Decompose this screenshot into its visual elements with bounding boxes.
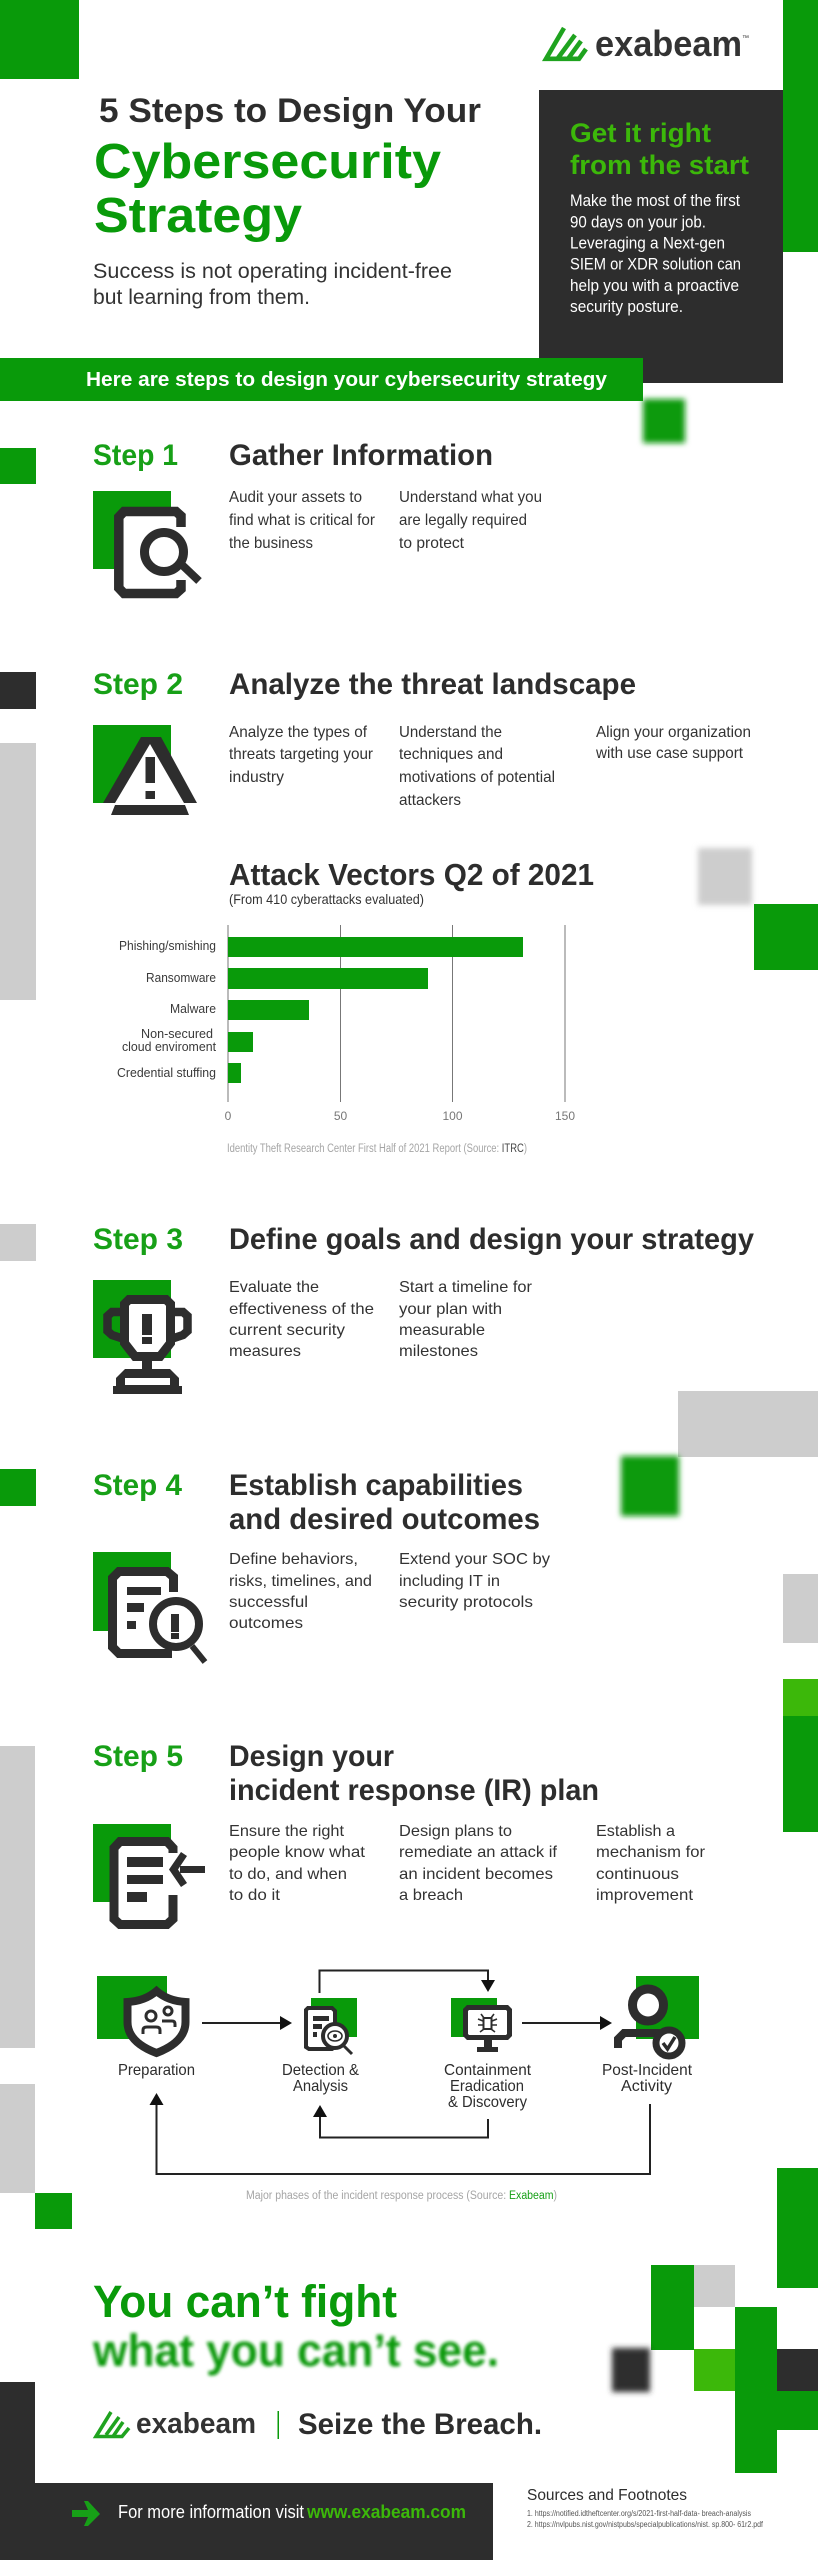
icon: phone with magnifier xyxy=(93,491,199,594)
arrow: containment to post-incident xyxy=(522,2016,612,2030)
arrow: detection to containment xyxy=(320,1970,495,1993)
step 1 heading: Gather Information xyxy=(229,439,493,472)
banner: steps intro xyxy=(0,358,643,401)
step 5 label: Step 5 xyxy=(93,1740,183,1773)
logo and tagline: exabeam xyxy=(136,2408,256,2440)
decorative block: right green lower xyxy=(777,2168,818,2288)
label: detection and analysis: Detection & xyxy=(282,2062,359,2079)
icon: trophy xyxy=(93,1280,188,1394)
arrow: containment back to detection xyxy=(313,2105,488,2138)
label: post-incident activity: Activity xyxy=(621,2078,672,2095)
icon: warning triangle xyxy=(93,725,197,815)
arrow: preparation to detection xyxy=(202,2016,292,2030)
sources and footnotes: 1. https://notified.idtheftcenter.org/s/2021-first-half-data- breach-analysis xyxy=(527,2509,751,2518)
bar chart: attack vectors xyxy=(117,925,575,1123)
panel: get it right from the start: help you with a proactive xyxy=(570,277,739,295)
sources and footnotes xyxy=(527,2487,764,2529)
decorative block: right gray large xyxy=(678,1391,818,1457)
bar chart: attack vectors: Ransomware xyxy=(146,970,216,985)
label: detection and analysis: Analysis xyxy=(293,2078,348,2095)
title block: Cybersecurity xyxy=(94,135,441,189)
step 4 heading xyxy=(229,1469,540,1536)
label: containment: Eradication xyxy=(450,2078,524,2095)
step 1 text column 1: find what is critical for xyxy=(229,512,376,529)
step 2 text column 1: industry xyxy=(229,769,284,786)
decorative block: top left green xyxy=(0,0,79,79)
logo: exabeam header: exabeam xyxy=(595,23,742,64)
step 5 text column 3: mechanism for xyxy=(596,1844,706,1861)
decorative block: blurred green xyxy=(643,399,685,443)
title block xyxy=(94,92,481,243)
chart heading: Attack Vectors Q2 of 2021 xyxy=(229,857,594,892)
footer bar xyxy=(35,2483,493,2560)
step 5 text column 1: to do, and when xyxy=(229,1866,347,1883)
step 3 text column 1: effectiveness of the xyxy=(229,1301,374,1318)
step 3 text column 2: Start a timeline for xyxy=(399,1279,533,1296)
step 5 text column 1: Ensure the right xyxy=(229,1823,345,1840)
decorative block: right light green xyxy=(783,1679,818,1716)
label: detection and analysis xyxy=(282,2062,359,2095)
decorative block: left gray step 5 xyxy=(0,1746,35,2048)
closing headline: You can’t fight xyxy=(93,2276,397,2327)
step 4 text column 1: Define behaviors, xyxy=(229,1551,358,1568)
decorative block: blurred dark xyxy=(612,2348,650,2392)
step 5 text column 2: an incident becomes xyxy=(399,1866,553,1883)
decorative block: left dark xyxy=(0,672,36,709)
step 2 text column 3 xyxy=(595,724,751,762)
title block: 5 Steps to Design Your xyxy=(99,92,481,130)
footer bar: For more information visit xyxy=(118,2502,304,2522)
bar chart: attack vectors: Malware xyxy=(170,1001,216,1016)
step 2 text column 3: Align your organization xyxy=(596,724,751,741)
step 5 text column 1: to do it xyxy=(229,1887,281,1904)
step 2 text column 1: threats targeting your xyxy=(229,746,374,763)
step 1 text column 1: Audit your assets to xyxy=(229,489,362,506)
step 3 text column 2: measurable xyxy=(399,1322,485,1339)
step 2 heading: Analyze the threat landscape xyxy=(229,668,636,701)
sources and footnotes: Sources and Footnotes xyxy=(527,2487,687,2504)
step 1 label: Step 1 xyxy=(93,439,178,472)
decorative block: left gray step 3 xyxy=(0,1224,36,1261)
step 5 text column 2 xyxy=(399,1823,558,1904)
step 1 text column 2: to protect xyxy=(399,535,465,552)
step 3 text column 1: Evaluate the xyxy=(229,1279,319,1296)
closing headline: what you can’t see. xyxy=(92,2325,499,2376)
label: containment: Containment xyxy=(444,2062,532,2079)
decorative block: right green xyxy=(754,904,818,970)
decorative block: blurred green step 4 xyxy=(621,1456,679,1516)
step 5 text column 3: continuous xyxy=(596,1866,679,1883)
icon: containment monitor with bug xyxy=(451,1998,510,2052)
step 4 text column 1: successful xyxy=(229,1594,308,1611)
bar chart: attack vectors: 150 xyxy=(555,1109,575,1123)
label: post-incident activity: Post-Incident xyxy=(602,2062,693,2079)
subtitle: Success is not operating incident-free xyxy=(93,259,452,283)
bar chart: attack vectors: cloud enviroment xyxy=(122,1039,216,1054)
step 5 heading: Design your xyxy=(229,1740,394,1773)
icon: detection and analysis xyxy=(306,1998,357,2054)
decorative pattern: bottom right blocks xyxy=(651,2265,818,2473)
label: post-incident activity xyxy=(602,2062,693,2095)
step 1 text column 1: the business xyxy=(229,535,313,552)
panel: get it right from the start: Make the most of the first xyxy=(570,192,740,210)
step 2 text column 2: techniques and xyxy=(399,746,503,763)
step 5 text column 3: Establish a xyxy=(596,1823,675,1840)
panel: get it right from the start: 90 days on your job. xyxy=(570,214,706,232)
step 2 text column 3: with use case support xyxy=(595,745,744,762)
bar chart: attack vectors: 100 xyxy=(442,1109,463,1123)
banner: steps intro: Here are steps to design your cybersecurity strategy xyxy=(86,368,608,391)
step 4 label: Step 4 xyxy=(93,1469,182,1502)
logo and tagline xyxy=(96,2408,542,2441)
step 4 text column 1: outcomes xyxy=(229,1615,303,1632)
icon: preparation shield xyxy=(97,1976,186,2053)
step 4 heading: Establish capabilities xyxy=(229,1469,523,1502)
chart subheading: (From 410 cyberattacks evaluated) xyxy=(229,891,424,907)
step 3 text column 2 xyxy=(399,1279,533,1360)
step 5 heading: incident response (IR) plan xyxy=(229,1774,599,1807)
step 5 text column 2: a breach xyxy=(399,1887,463,1904)
decorative block: left green step 1 xyxy=(0,448,36,484)
sources and footnotes: 2. https://nvlpubs.nist.gov/nistpubs/specialpublications/nist. sp.800- 61r2.pdf xyxy=(527,2520,764,2529)
logo: exabeam header: ™ xyxy=(742,35,749,42)
title block: Strategy xyxy=(94,189,302,243)
bar chart: attack vectors: Non-secured xyxy=(141,1026,213,1041)
step 5 text column 2: Design plans to xyxy=(399,1823,512,1840)
step 2 label: Step 2 xyxy=(93,668,183,701)
subtitle xyxy=(93,259,452,309)
step 5 text column 3: improvement xyxy=(596,1887,694,1904)
step 1 text column 2 xyxy=(399,489,542,552)
label: preparation: Preparation xyxy=(118,2062,195,2079)
step 2 text column 2: attackers xyxy=(399,792,461,809)
step 2 text column 2: motivations of potential xyxy=(399,769,555,786)
decorative block: left gray lower xyxy=(0,2084,35,2193)
step 5 text column 2: remediate an attack if xyxy=(399,1844,558,1861)
decorative block: small left green xyxy=(35,2193,72,2229)
panel: get it right from the start: from the start xyxy=(570,150,749,180)
icon: document with arrow xyxy=(93,1824,205,1924)
step 1 text column 1 xyxy=(229,489,376,552)
step 5 heading xyxy=(229,1740,599,1807)
step 2 text column 2 xyxy=(399,724,555,809)
label: containment: & Discovery xyxy=(448,2094,527,2111)
closing headline xyxy=(92,2276,499,2376)
decorative block: top right green xyxy=(783,0,818,252)
step 3 text column 1: current security xyxy=(229,1322,345,1339)
step 3 text column 2: milestones xyxy=(399,1343,478,1360)
icon: document with magnifier xyxy=(93,1552,205,1662)
step 3 heading: Define goals and design your strategy xyxy=(229,1223,754,1256)
chart source note: Identity Theft Research Center First Half of 2021 Report (Source: ITRC) xyxy=(227,1143,527,1155)
decorative block: left dark footer xyxy=(0,2382,35,2560)
step 1 text column 2: are legally required xyxy=(399,512,527,529)
panel: get it right from the start: Get it right xyxy=(570,118,711,148)
decorative block: right gray small xyxy=(783,1574,818,1643)
subtitle: but learning from them. xyxy=(93,285,310,309)
arrow: post-incident back to preparation xyxy=(150,2093,650,2174)
step 4 text column 1: risks, timelines, and xyxy=(229,1573,372,1590)
step 4 heading: and desired outcomes xyxy=(229,1503,540,1536)
panel: get it right from the start: Leveraging a Next-gen xyxy=(570,234,725,252)
step 4 text column 2: security protocols xyxy=(399,1594,533,1611)
step 2 text column 1 xyxy=(229,724,374,786)
step 5 text column 1: people know what xyxy=(229,1844,366,1861)
logo and tagline: Seize the Breach. xyxy=(298,2408,542,2441)
decorative block: right green tall xyxy=(783,1716,818,1832)
icon: post-incident person with check xyxy=(618,1976,699,2056)
decorative block: left green step 4 xyxy=(0,1469,36,1506)
step 5 text column 1 xyxy=(229,1823,366,1904)
footer bar: www.exabeam.com xyxy=(306,2502,466,2522)
diagram caption: Major phases of the incident response process (Source: Exabeam) xyxy=(246,2190,557,2202)
step 4 text column 1 xyxy=(229,1551,372,1632)
step 3 label: Step 3 xyxy=(93,1223,183,1256)
bar chart: attack vectors: Phishing/smishing xyxy=(119,938,216,953)
label: containment xyxy=(444,2062,532,2111)
step 2 text column 1: Analyze the types of xyxy=(229,724,368,741)
step 3 text column 2: your plan with xyxy=(399,1301,502,1318)
panel: get it right from the start: security posture. xyxy=(570,298,683,316)
bar chart: attack vectors: 50 xyxy=(334,1109,347,1123)
panel: get it right from the start xyxy=(539,90,783,383)
step 4 text column 2 xyxy=(399,1551,550,1611)
step 2 text column 2: Understand the xyxy=(399,724,502,741)
decorative block: left gray xyxy=(0,743,36,1000)
step 4 text column 2: Extend your SOC by xyxy=(399,1551,550,1568)
step 5 text column 3 xyxy=(596,1823,706,1904)
decorative block: blurred gray xyxy=(698,848,752,905)
step 3 text column 1 xyxy=(229,1279,374,1360)
step 1 text column 2: Understand what you xyxy=(399,489,542,506)
panel: get it right from the start: SIEM or XDR solution can xyxy=(570,256,741,274)
step 3 text column 1: measures xyxy=(229,1343,301,1360)
step 4 text column 2: including IT in xyxy=(399,1573,500,1590)
bar chart: attack vectors: 0 xyxy=(225,1109,232,1123)
bar chart: attack vectors: Credential stuffing xyxy=(117,1065,216,1080)
